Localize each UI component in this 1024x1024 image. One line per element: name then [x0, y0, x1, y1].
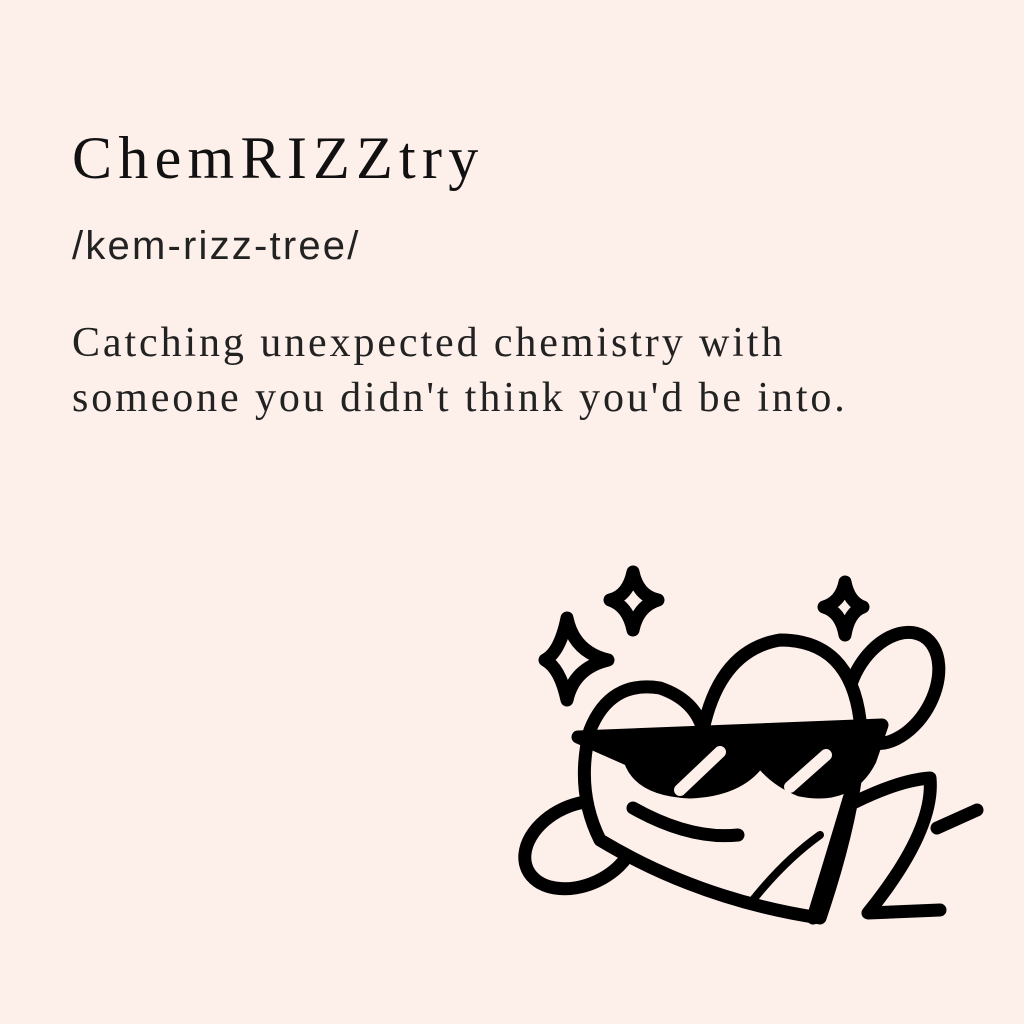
icon: sparkles: [545, 572, 863, 700]
icon: arm and leg: [753, 745, 977, 918]
icon: sunglasses: [578, 725, 882, 792]
definition text: Catching unexpected chemistry with: [72, 320, 785, 366]
pronunciation: /kem-rizz-tree/: [72, 224, 361, 268]
icon: smile: [633, 808, 738, 836]
title: ChemRIZZtry: [72, 125, 485, 191]
icon: ears: [511, 616, 958, 906]
definition text: [72, 320, 848, 421]
definition text: someone you didn't think you'd be into.: [72, 375, 848, 421]
icon: heart body: [584, 640, 860, 918]
